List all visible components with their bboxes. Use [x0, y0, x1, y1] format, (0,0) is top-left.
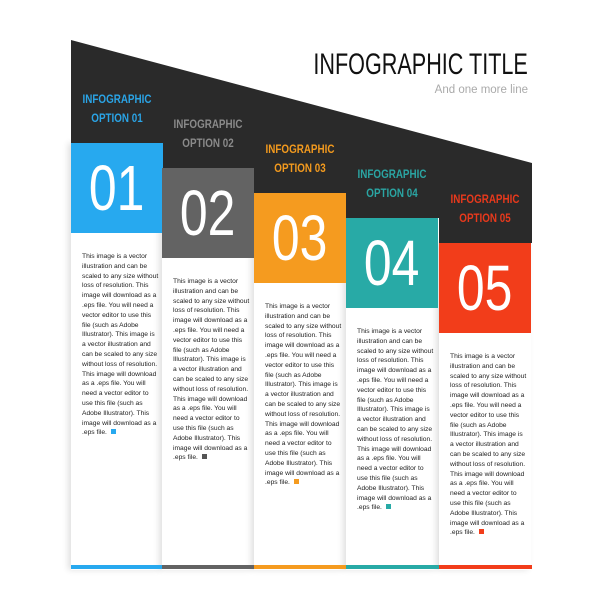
number boxes: 02 [180, 177, 236, 249]
text blocks: This image is a vector illustration and can be scaled to any size without loss of resolution. This image will download as a .eps file. You will need a vector editor to use this file (such as Adobe Illustrator). This image is a vector illustration and can be scaled to any size without loss of resolution. This image will download as a .eps file. You will need a vector editor to use this file (such as Adobe Illustrator). This image will download as a .eps file. [357, 328, 433, 511]
number boxes: 01 [89, 152, 145, 224]
text blocks: This image is a vector illustration and can be scaled to any size without loss of resolution. This image will download as a .eps file. You will need a vector editor to use this file (such as Adobe Illustrator). This image is a vector illustration and can be scaled to any size without loss of resolution. This image will download as a .eps file. You will need a vector editor to use this file (such as Adobe Illustrator). This image will download as a .eps file. [450, 353, 526, 536]
option labels: OPTION 04 [366, 186, 418, 200]
number boxes: 05 [457, 252, 513, 324]
option labels: INFOGRAPHIC [451, 192, 519, 206]
bottom colour bars [71, 565, 532, 569]
option labels: OPTION 03 [274, 161, 326, 175]
text blocks: This image is a vector illustration and can be scaled to any size without loss of resolution. This image will download as a .eps file. You will need a vector editor to use this file (such as Adobe Illustrator). This image is a vector illustration and can be scaled to any size without loss of resolution. This image will download as a .eps file. You will need a vector editor to use this file (such as Adobe Illustrator). This image will download as a .eps file. [82, 253, 158, 436]
title: And one more line [435, 84, 528, 96]
option labels: OPTION 02 [182, 136, 234, 150]
option labels [83, 92, 520, 225]
title [314, 48, 528, 96]
text blocks: This image is a vector illustration and can be scaled to any size without loss of resolution. This image will download as a .eps file. You will need a vector editor to use this file (such as Adobe Illustrator). This image is a vector illustration and can be scaled to any size without loss of resolution. This image will download as a .eps file. You will need a vector editor to use this file (such as Adobe Illustrator). This image will download as a .eps file. [173, 278, 249, 461]
text blocks [82, 253, 526, 536]
option labels: OPTION 05 [459, 211, 511, 225]
option labels: INFOGRAPHIC [174, 117, 242, 131]
option labels: INFOGRAPHIC [358, 167, 426, 181]
number boxes: 03 [272, 202, 328, 274]
option labels: INFOGRAPHIC [266, 142, 334, 156]
option labels: OPTION 01 [91, 111, 143, 125]
number boxes [71, 143, 531, 333]
number boxes: 04 [364, 227, 420, 299]
title: INFOGRAPHIC TITLE [314, 48, 528, 81]
text blocks: This image is a vector illustration and can be scaled to any size without loss of resolution. This image will download as a .eps file. You will need a vector editor to use this file (such as Adobe Illustrator). This image is a vector illustration and can be scaled to any size without loss of resolution. This image will download as a .eps file. You will need a vector editor to use this file (such as Adobe Illustrator). This image will download as a .eps file. [265, 303, 341, 486]
option labels: INFOGRAPHIC [83, 92, 151, 106]
